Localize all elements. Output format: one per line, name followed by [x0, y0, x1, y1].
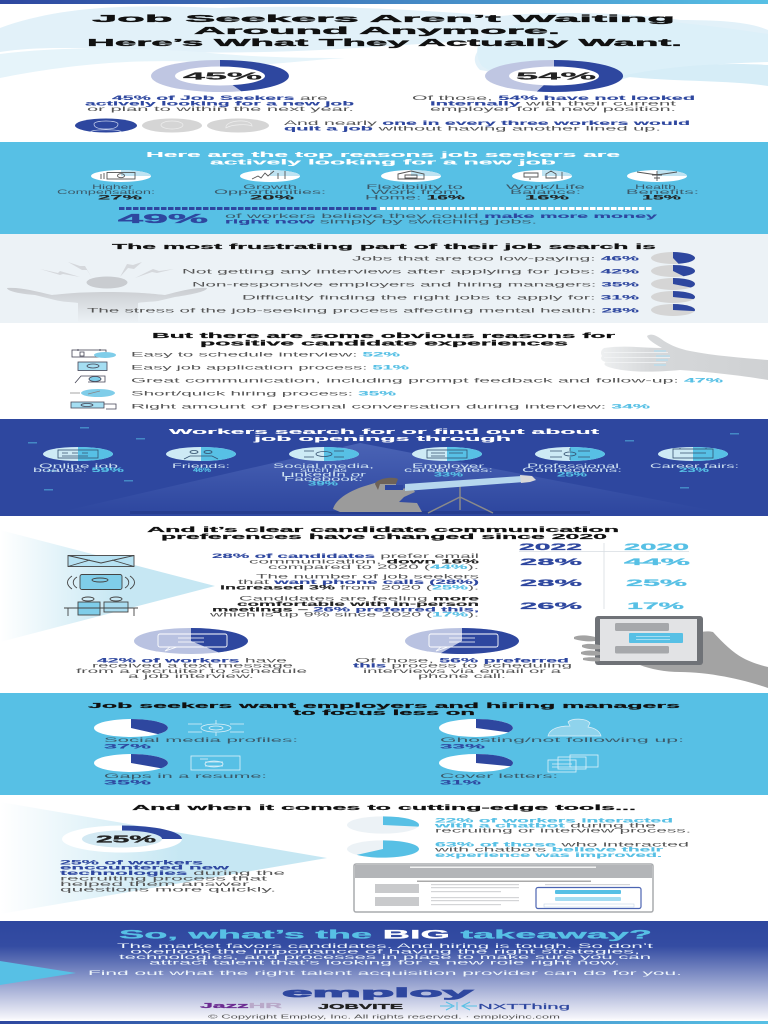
text: 63% of those: with chatbots believe their — [432, 848, 665, 854]
dashed progress bar: 49% — [119, 207, 652, 210]
comparison table: 17% — [627, 601, 686, 612]
text: 54% not looked internally — [412, 96, 696, 113]
label: health benefits: 15% — [642, 196, 683, 202]
label: employer career sites: career sites: — [404, 468, 494, 474]
background triangle — [0, 530, 215, 642]
label: career fairs: Career fairs: — [650, 464, 740, 470]
text: new technologies — [60, 860, 287, 893]
item: ghosting: 33% — [440, 744, 487, 750]
text: make more money — [225, 214, 659, 226]
text: summary paragraph: technologies, and processes in place to make sure you can — [119, 955, 651, 961]
row: no interviews — [182, 265, 695, 277]
list: reasons — [131, 352, 725, 410]
text: 22% of workers: with a chatbot during the — [432, 824, 658, 830]
row: non-responsive: Non-responsive employers and hiring managers: 35% — [192, 282, 641, 288]
donut chart: 54%: 54% — [516, 70, 599, 82]
label: work/life balance — [506, 185, 587, 202]
label: flexibility: Home: 16% — [365, 196, 467, 202]
heading: positive experiences: But there are some obvious reasons for — [152, 331, 615, 340]
label: social media: Social media, — [273, 464, 375, 470]
label: growth opportunities: Growth — [243, 185, 297, 191]
text: one in three workers — [284, 121, 691, 132]
label: career fairs — [650, 464, 740, 474]
text: 22% of workers — [432, 818, 692, 834]
donut chart: 25% — [62, 826, 182, 852]
text: one in three workers: quit a job without having another lined up. — [284, 126, 662, 132]
logo: JazzHR: Jazz HR — [200, 1003, 282, 1010]
comparison table: 25% — [626, 578, 689, 589]
heading: channels — [169, 427, 601, 443]
heading: takeaway: So, what’s the BIG takeaway? — [119, 930, 652, 942]
panel: header — [0, 6, 768, 132]
label: work/life balance: 16% — [525, 196, 571, 202]
icon: frustrated person — [7, 262, 207, 323]
text: 22% of workers: 22% of workers interacted — [435, 818, 674, 824]
text: in-person preference — [207, 596, 481, 618]
text: phone preference: that want phone calls (28%) — [238, 580, 479, 586]
row: non-responsive — [192, 278, 695, 290]
bottom gradient bar — [0, 1021, 768, 1024]
label: flexibility — [365, 185, 467, 202]
logo: employ: employ — [282, 985, 476, 1000]
label: higher compensation: Higher — [92, 185, 133, 191]
item: ghosting: Ghosting/not following up: — [440, 738, 685, 744]
label: flexibility: Flexibility to — [366, 185, 465, 191]
text: copyright: © Copyright Employ, Inc. All rights reserved. · employinc.com — [208, 1014, 560, 1020]
heading: positive experiences — [152, 331, 615, 348]
item: cover letters — [439, 754, 598, 786]
heading: tools: And when it comes to cutting-edge tools... — [132, 803, 636, 812]
text: summary paragraph — [117, 944, 654, 966]
comparison table: 28% — [520, 557, 584, 568]
label: higher compensation — [57, 185, 156, 202]
comparison table: 44% — [624, 557, 692, 568]
title: Here’s What They Actually Want. — [87, 37, 682, 49]
label: growth opportunities: 20% — [250, 196, 296, 202]
label: professional connections: Professional — [527, 464, 619, 470]
label: friends — [172, 464, 231, 474]
oval chart: 56% preferred — [405, 628, 519, 654]
text: 56% preferred: phone call. — [418, 674, 507, 680]
text: in-person preference: which is up 9% since 2020 ( 17% ). — [207, 612, 480, 618]
text: email preference: compared to 2020 ( 44% ). — [268, 565, 480, 571]
icon: hand holding phone — [574, 616, 768, 688]
text: in-person preference: comfortable with in-person — [237, 602, 480, 608]
top gradient bar — [0, 0, 768, 4]
text: 42% of workers: a job interview. — [128, 674, 255, 680]
item: gaps in resume: 35% — [104, 780, 154, 786]
label: professional connections — [522, 464, 623, 479]
text: 42% of workers — [76, 658, 309, 680]
item: social media profiles — [94, 719, 299, 750]
title — [87, 13, 682, 49]
item: cover letters: 31% — [440, 780, 483, 786]
item: gaps in resume: Gaps in a resume: — [104, 774, 268, 780]
text: 45% of job seekers: or plan to within the next year. — [87, 107, 355, 113]
text: 54% not looked internally: employer for a new position. — [430, 107, 677, 113]
text: 22% of workers: recruiting or interview process. — [435, 828, 692, 834]
label: social media: such as — [300, 468, 347, 474]
heading: top reasons: Here are the top reasons job seekers are — [146, 150, 620, 159]
heading: focus less on: to focus less on — [293, 708, 477, 717]
donut chart: 54% — [485, 60, 623, 92]
icon: three worker heads — [75, 118, 269, 132]
row: stress — [87, 304, 695, 316]
row: low-paying — [352, 252, 695, 264]
label: social media — [273, 464, 375, 487]
label: work/life balance: Work/Life — [506, 185, 587, 191]
text: summary paragraph: The market favors candidates. And hiring is tough. So don’t — [117, 944, 654, 950]
text: new technologies: helped them answer — [60, 882, 249, 888]
text: email preference: communication, down 16% — [249, 560, 481, 566]
label: employer career sites: 33% — [434, 473, 465, 479]
item: social media profiles: 37% — [104, 744, 154, 750]
list: reasons: Easy job application process: 51% — [131, 365, 411, 371]
row: difficulty finding: Difficulty finding the right jobs to apply for: 31% — [242, 295, 641, 301]
label: growth opportunities: Opportunities: — [214, 190, 327, 196]
icon: envelope — [68, 556, 134, 566]
text: email preference — [212, 554, 481, 571]
oval chart: 42% text message — [134, 628, 248, 654]
panel: communication preferences — [0, 525, 768, 688]
light beam — [60, 443, 720, 512]
label: higher compensation: 27% — [98, 196, 144, 202]
heading: focus less on — [88, 701, 680, 717]
icons: reason ovals — [91, 170, 687, 182]
text: 54% not looked internally: internally with their current — [430, 102, 677, 108]
text: 42% of workers: received a text message — [92, 664, 295, 670]
comparison table: 28% — [520, 578, 584, 589]
text: 63% of those — [432, 842, 689, 859]
text: 45% of job seekers — [85, 96, 355, 113]
list: reasons: Right amount of personal conversation during interview: 34% — [131, 404, 652, 410]
label: online job boards: boards: 59% — [33, 468, 126, 474]
panel: positive experiences — [70, 331, 768, 410]
stat: 49%: 49% — [118, 211, 209, 226]
text: call to action: Find out what the right talent acquisition provider can do for you. — [88, 971, 683, 977]
icon: thumbs up hand — [601, 335, 768, 380]
text: new technologies: 25% of workers — [60, 860, 205, 866]
heading: channels: Workers search for or find out about — [169, 427, 601, 436]
text: new technologies: questions more quickly. — [60, 887, 277, 893]
background triangle — [0, 802, 327, 914]
decorative sparkles — [28, 427, 739, 490]
label: social media: Facebook: — [284, 477, 364, 483]
heading: communication — [147, 525, 621, 541]
logo: Jobvite: JOBVITE — [318, 1002, 403, 1011]
label: growth opportunities — [214, 185, 327, 202]
item: ghosting — [439, 719, 685, 750]
comparison table — [519, 542, 692, 612]
heading: top reasons — [146, 150, 620, 166]
title: Job Seekers Aren’t Waiting — [92, 13, 675, 25]
panel: job search channels — [0, 419, 768, 516]
row: low-paying: Jobs that are too low-paying: 46% — [352, 256, 641, 262]
text: 45% of job seekers: 45% of Job Seekers are — [112, 96, 330, 102]
heading: positive experiences: positive candidate experiences — [200, 338, 568, 348]
label: employer career sites — [404, 464, 494, 479]
icon: ringing phone — [68, 574, 134, 590]
label: health benefits: Benefits: — [626, 190, 700, 196]
comparison table: 26% — [520, 601, 584, 612]
label: friends: 46% — [193, 468, 212, 474]
text: make more money: right now simply by switching jobs. — [225, 220, 538, 226]
heading: channels: job openings through — [251, 434, 513, 443]
pie chart: 22% chatbot — [347, 816, 419, 834]
comparison table: 2020 — [624, 542, 689, 553]
illustration: person with telescope — [333, 475, 536, 513]
text: summary paragraph: overlook the importance of having the right strategies, — [130, 950, 641, 956]
text: new technologies: technologies during the — [60, 871, 287, 877]
donut chart: 45%: 45% — [183, 70, 264, 82]
text: 63% of those: 63% of those who interacted — [435, 842, 689, 848]
item: social media profiles: Social media profiles: — [104, 738, 299, 744]
icons: channel ovals — [43, 447, 728, 461]
logo: NXTThing: NXTThing — [478, 1004, 570, 1011]
text: 56% preferred: Of those, 56% preferred — [355, 658, 570, 664]
label: higher compensation: Compensation: — [57, 190, 156, 196]
heading: focus less on: Job seekers want employers and hiring managers — [88, 701, 680, 710]
donut chart: 25%: 25% — [96, 834, 158, 846]
panel: big takeaway — [0, 921, 768, 1024]
comparison table: 2022 — [519, 542, 582, 553]
logo: NXTThing — [440, 1002, 570, 1011]
icons: positive experiences — [70, 349, 116, 409]
row: no interviews: Not getting any interviews after applying for jobs: 42% — [182, 269, 641, 275]
title: Around Anymore. — [194, 25, 560, 37]
label: career fairs: 23% — [679, 468, 711, 474]
label: friends: Friends: — [172, 464, 231, 470]
text: phone preference: increased 3% from 2020 ( 25% ). — [220, 585, 480, 591]
text: 42% of workers: 42% of workers have — [97, 658, 289, 664]
donut chart: 45% — [151, 60, 289, 92]
label: social media: 39% — [308, 481, 340, 487]
text: 56% preferred: interviews via email or a — [363, 669, 563, 675]
row: stress: The stress of the job-seeking process affecting mental health: 28% — [87, 308, 641, 314]
heading: communication: preferences have changed since 2020 — [161, 532, 607, 541]
heading: top reasons: actively looking for a new job — [210, 158, 558, 166]
text: 56% preferred: this process to scheduling — [353, 664, 572, 670]
text: phone preference: The number of job seekers — [256, 574, 479, 580]
list: reasons: Great communication, including prompt feedback and follow-up: 47% — [131, 378, 725, 384]
text: 56% preferred — [353, 658, 572, 680]
text: 42% of workers: from a recruiter to schedule — [76, 669, 309, 675]
panel: cutting-edge tools — [0, 802, 692, 914]
text: email preference: 28% of candidates prefer email — [212, 554, 479, 560]
icon: people meeting — [64, 597, 138, 616]
item: gaps in resume — [94, 754, 268, 786]
cloud background — [0, 6, 768, 86]
illustration: browser with chatbot — [354, 864, 653, 912]
label: work/life balance: Balance: — [510, 190, 582, 196]
text: in-person preference: Candidates are feeling more — [239, 596, 481, 602]
heading: communication: And it’s clear candidate communication — [147, 525, 621, 534]
label: flexibility: Work from — [371, 190, 459, 196]
pie chart: 63% improved — [347, 840, 419, 858]
text: new technologies: recruiting process that — [60, 876, 268, 882]
text: 54% not looked internally: Of those, 54% have not looked — [412, 96, 696, 102]
row: difficulty finding — [242, 291, 695, 303]
arrow: teal pointer — [0, 961, 76, 985]
list: reasons: Easy to schedule interview: 52% — [131, 352, 402, 358]
text: in-person preference: meetings – 26% preferred this, — [212, 607, 480, 613]
label: employer career sites: Employer — [412, 464, 484, 470]
text: 63% of those: experience was improved. — [435, 853, 663, 859]
text: phone preference — [220, 574, 480, 591]
label: professional connections: Connections: — [522, 468, 623, 474]
panel: top reasons — [0, 142, 768, 234]
label: health benefits: Health — [635, 185, 676, 191]
panel: focus less on — [0, 693, 768, 795]
text: make more money: of workers believe they could make more money — [225, 214, 659, 220]
text: new technologies: encountered new — [60, 866, 230, 872]
item: cover letters: Cover letters: — [440, 774, 559, 780]
label: online job boards — [33, 464, 126, 474]
label: health benefits — [626, 185, 700, 202]
label: online job boards: Online job — [39, 464, 120, 470]
label: professional connections: 25% — [557, 473, 589, 479]
panel: frustrations — [0, 234, 768, 323]
label: social media: LinkedIn or — [281, 473, 366, 479]
text: 45% of job seekers: actively looking for a new job — [85, 102, 355, 108]
list: reasons: Short/quick hiring process: 35% — [131, 391, 398, 397]
text: summary paragraph: attract talent that’s looking for a new role right now. — [149, 960, 621, 966]
heading: frustrations: The most frustrating part of their job search is — [112, 242, 656, 251]
text: one in three workers: And nearly one in every three workers would — [284, 121, 691, 127]
